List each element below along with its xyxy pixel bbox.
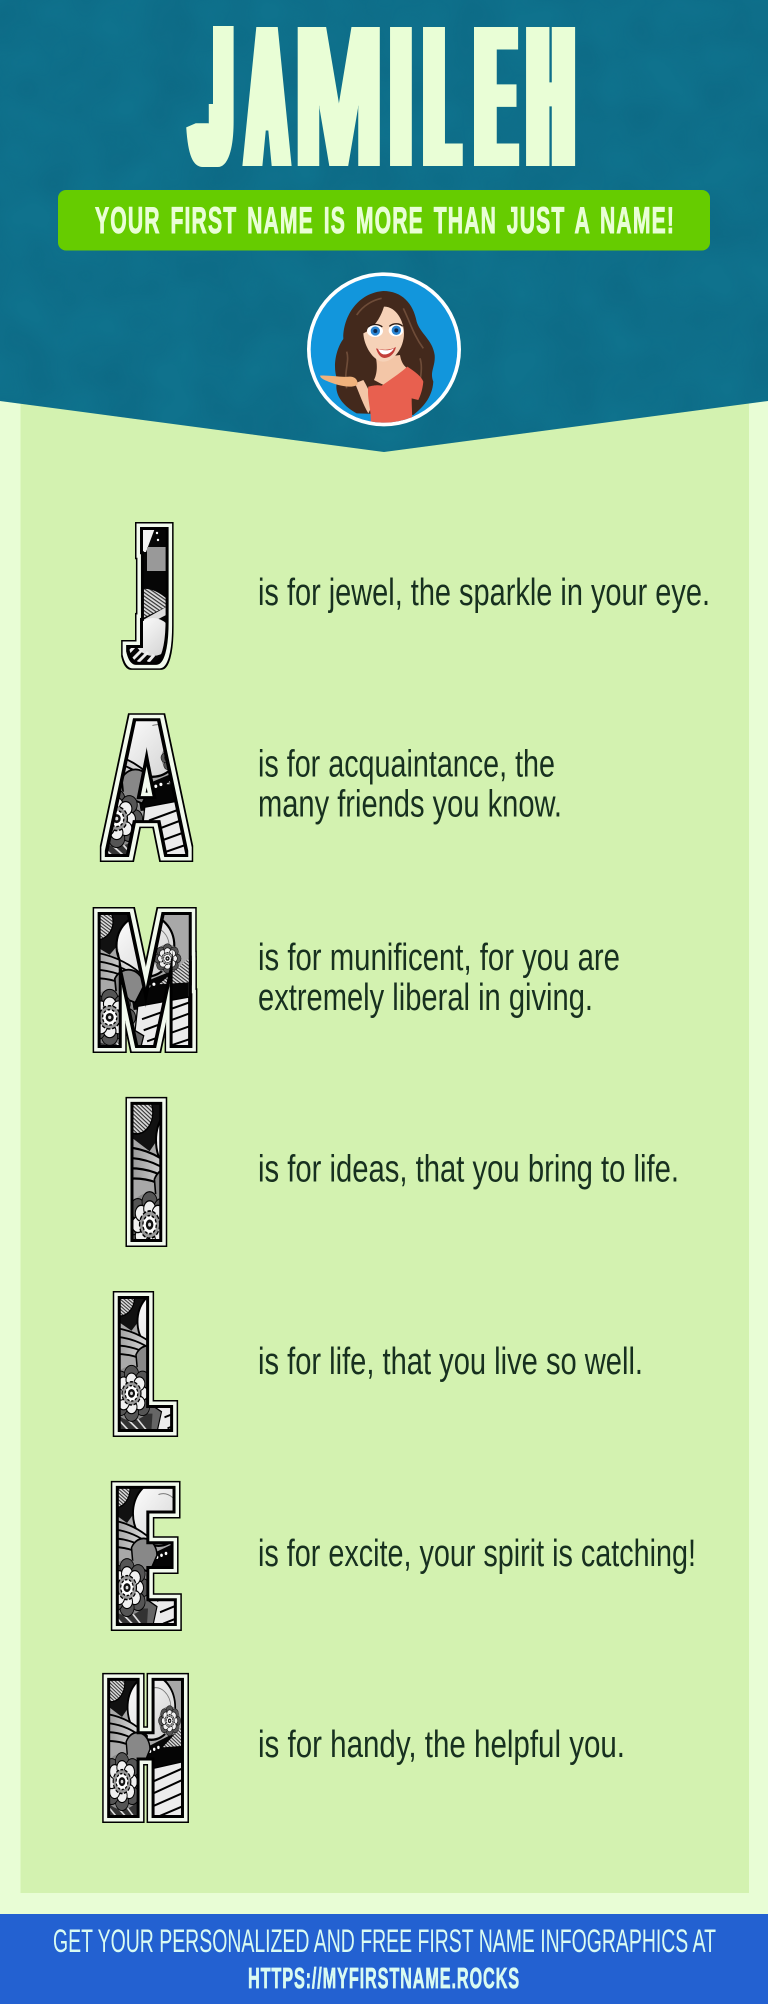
panel: letters background: [20, 380, 749, 1893]
letter M: [92, 907, 198, 1053]
text: M lines: [258, 937, 620, 1019]
letter E: [110, 1480, 182, 1631]
letter I: [125, 1096, 168, 1247]
text: L line: is for life, that you live so well.: [258, 1341, 643, 1383]
text: A lines: is for acquaintance, the: [258, 744, 555, 786]
letter L: [112, 1291, 178, 1437]
tagline bar: [58, 190, 710, 250]
header banner: [0, 0, 768, 452]
text: M lines: is for munificent, for you are: [258, 937, 620, 979]
text: H line: is for handy, the helpful you.: [258, 1724, 625, 1766]
letter H: [102, 1672, 189, 1823]
footer band: [0, 1914, 768, 2004]
text: A lines: many friends you know.: [258, 784, 562, 826]
icon: avatar portrait: [307, 272, 461, 426]
text: A lines: [258, 744, 562, 826]
letter J: [118, 525, 173, 665]
text: M lines: extremely liberal in giving.: [258, 977, 593, 1019]
footer line 2: HTTPS://MYFIRSTNAME.ROCKS: [248, 1963, 520, 1995]
title: [186, 26, 576, 167]
letter A: [100, 713, 194, 862]
